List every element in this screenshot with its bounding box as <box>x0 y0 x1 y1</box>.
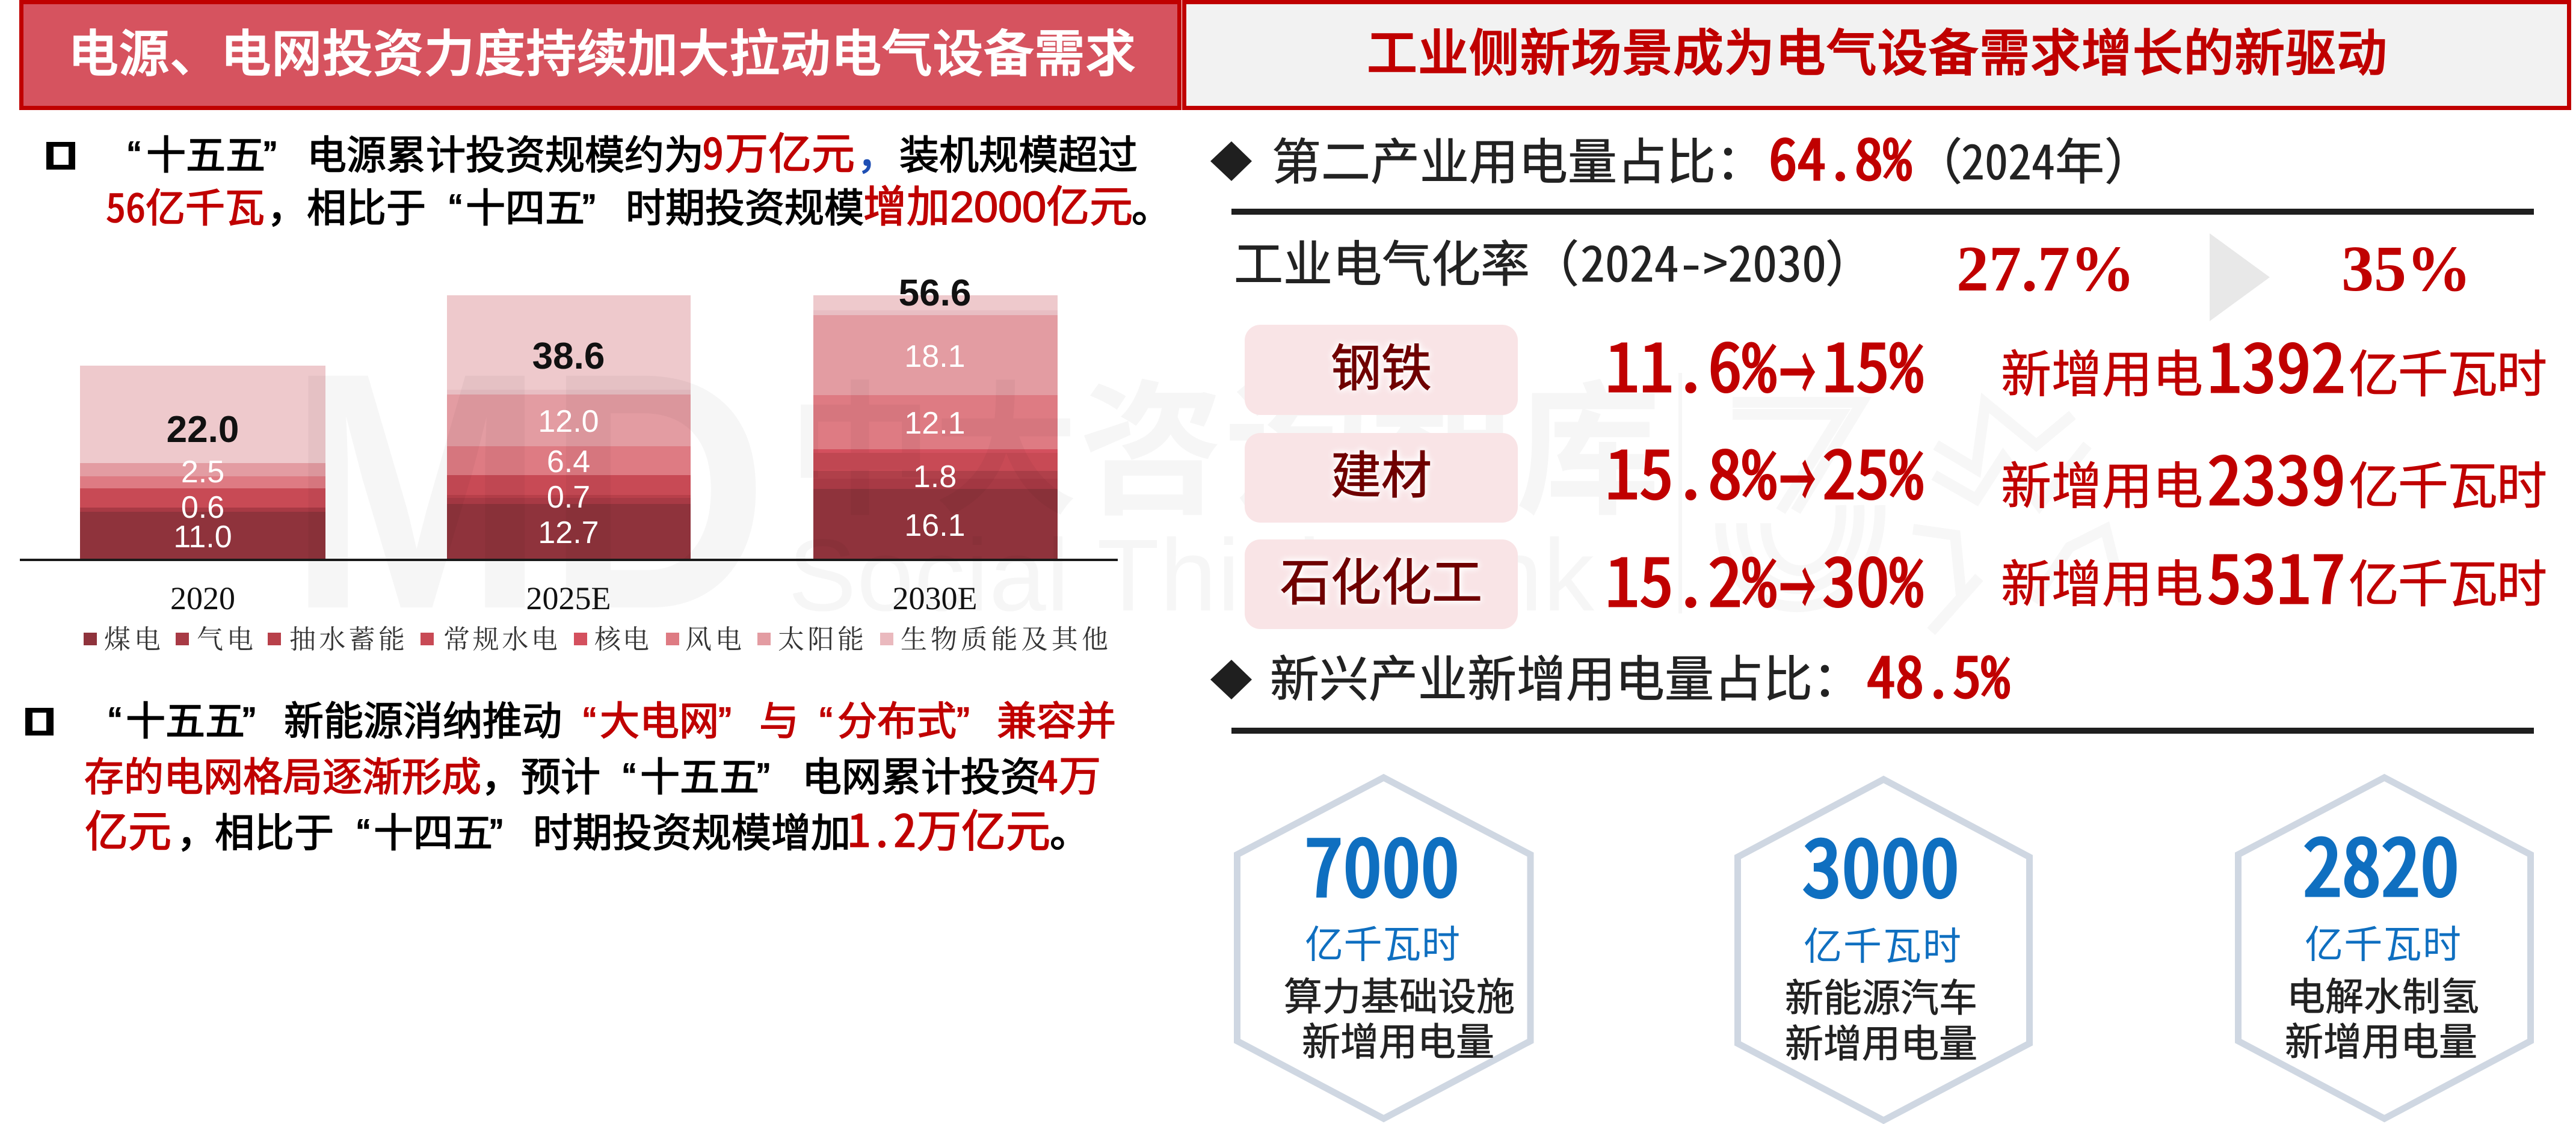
row: industrial electrification rate: 工业电气化率（ <box>1234 238 1579 292</box>
text block: grid investment: 分布式 <box>837 699 957 743</box>
text block: grid investment: 大电网 <box>600 699 719 743</box>
heading: secondary industry share <box>1210 114 2154 197</box>
text block: grid investment: “ <box>583 699 596 743</box>
text block: power investment: 电源累计投资规模约为 <box>307 133 704 177</box>
chart legend: 气电 <box>197 618 253 656</box>
text block: power investment: 万亿元 <box>725 131 855 179</box>
heading: secondary industry share: 2024 <box>1961 124 2055 194</box>
heading: emerging industry share <box>1210 632 2010 714</box>
text block: grid investment: 十四五 <box>374 811 493 855</box>
text block: grid investment: ” <box>957 699 970 743</box>
text block: power investment: “ <box>128 133 141 177</box>
text block: power investment: ” <box>582 186 596 230</box>
row: petrochemicals: 石化化工 <box>1280 554 1482 611</box>
chart data labels: 11.0 <box>173 520 232 554</box>
text block: grid investment: ” <box>242 699 256 743</box>
chart legend: 核电 <box>594 618 649 656</box>
text block: grid investment: 万亿元 <box>917 806 1050 856</box>
icon: hollow square bullet <box>25 708 54 736</box>
chart data labels: 18.1 <box>904 339 966 374</box>
watermark <box>288 302 2124 679</box>
row: petrochemicals: 5317 <box>2207 526 2346 623</box>
hexagon card: electrolytic hydrogen <box>2238 778 2530 1119</box>
row: steel: 钢铁 <box>1331 340 1432 397</box>
text block: power investment: 56 <box>106 176 146 234</box>
chart data labels: 38.6 <box>532 336 605 377</box>
row: building materials: 2339 <box>2207 427 2346 524</box>
text block: power investment: “ <box>449 186 462 230</box>
hexagon card: new energy vehicles: 新增用电量 <box>1785 1022 1977 1066</box>
row: petrochemicals: 新增用电 <box>2001 556 2203 613</box>
row: building materials: 15.8% <box>1605 421 1776 518</box>
arrow: grey triangle <box>2210 233 2270 321</box>
chart: stacked bars of installed capacity <box>80 295 1058 560</box>
heading: secondary industry share: 第二产业用电量占比： <box>1272 135 1765 190</box>
text block: grid investment: 十五五 <box>640 755 759 799</box>
icon: diamond <box>1210 141 1252 181</box>
text block: grid investment: ” <box>718 699 732 743</box>
text block: power investment: 9 <box>702 118 724 182</box>
row: steel: 11.6% <box>1605 314 1776 411</box>
chart data labels: 12.0 <box>538 404 599 439</box>
chart data labels: 22.0 <box>167 409 239 450</box>
chart data labels: 6.4 <box>547 444 590 479</box>
hexagon card: new energy vehicles: 3000 <box>1802 805 1959 920</box>
text block: power investment: ” <box>263 133 277 177</box>
divider <box>1231 728 2534 734</box>
chart x axis labels: 2030E <box>893 580 977 616</box>
text block: grid investment: 时期投资规模增加 <box>533 811 851 855</box>
chart data labels: 1.8 <box>913 459 957 494</box>
text block: grid investment: ” <box>490 811 503 855</box>
heading: emerging industry share: 48.5% <box>1867 632 2010 714</box>
row: building materials: 建材 <box>1331 447 1432 504</box>
chart legend: 太阳能 <box>778 618 864 656</box>
row: building materials: 亿千瓦时 <box>2349 458 2547 515</box>
text block: grid investment: ， <box>177 811 217 855</box>
hexagon card: computing infrastructure <box>1237 778 1530 1119</box>
text block: grid investment: 1.2 <box>848 794 916 860</box>
chart data labels: 0.7 <box>547 480 590 515</box>
chart data labels: 12.1 <box>904 406 966 441</box>
text block: power investment: ， <box>857 133 897 177</box>
row: industrial electrification rate: 35% <box>2341 233 2471 305</box>
text block: grid investment: 兼容并 <box>997 699 1116 743</box>
chart data labels: 16.1 <box>904 508 966 543</box>
chart legend: 常规水电 <box>443 618 558 656</box>
hexagon card: electrolytic hydrogen: 亿千瓦时 <box>2305 923 2461 966</box>
heading: secondary industry share: 64.8% <box>1769 114 1912 197</box>
text block: grid investment: 相比于 <box>215 811 334 855</box>
hexagon card: computing infrastructure: 算力基础设施 <box>1284 975 1515 1019</box>
text block: power investment <box>46 118 1171 234</box>
hexagon card: computing infrastructure: 亿千瓦时 <box>1305 923 1460 966</box>
text block: power investment: 。 <box>1132 186 1171 230</box>
chart data labels: 12.7 <box>538 515 599 550</box>
chart x axis labels: 2025E <box>526 580 611 616</box>
hexagon card: electrolytic hydrogen: 电解水制氢 <box>2287 975 2479 1019</box>
text block: grid investment: 预计 <box>521 755 600 799</box>
text block: grid investment: 十五五 <box>126 699 245 743</box>
text block: power investment: ， <box>267 186 307 230</box>
row: steel: 亿千瓦时 <box>2349 346 2547 403</box>
watermark: 中大咨询智库 <box>788 372 1660 533</box>
row: industrial electrification rate <box>1234 224 2471 321</box>
bar: 2020 <box>80 366 325 560</box>
row: building materials: 25% <box>1822 421 1923 518</box>
text block: grid investment: “ <box>819 699 833 743</box>
hexagon card: computing infrastructure: 7000 <box>1304 805 1459 920</box>
chart axis <box>20 559 1118 561</box>
chart legend: 风电 <box>685 618 742 656</box>
panel: right header <box>1184 2 2569 108</box>
row: petrochemicals: 15.2% <box>1605 529 1776 626</box>
heading: secondary industry share: 年） <box>2055 135 2154 190</box>
text block: power investment: 十四五 <box>466 186 585 230</box>
panel: right header: 工业侧新场景成为电气设备需求增长的新驱动 <box>1367 25 2387 82</box>
hexagon card: electrolytic hydrogen: 新增用电量 <box>2285 1021 2477 1064</box>
chart data labels: 2.5 <box>181 455 224 490</box>
text block: grid investment: “ <box>108 699 122 743</box>
chart data labels <box>167 272 971 554</box>
text block: power investment: 时期投资规模 <box>626 186 864 230</box>
text block: grid investment: ” <box>757 755 770 799</box>
text block: power investment: 十五五 <box>146 133 265 177</box>
text block: grid investment: 存的电网格局逐渐形成 <box>84 755 481 799</box>
icon: hollow square bullet <box>46 142 75 170</box>
panel: left header: 电源、电网投资力度持续加大拉动电气设备需求 <box>68 26 1136 82</box>
hexagon card: new energy vehicles: 亿千瓦时 <box>1804 925 1961 968</box>
chart legend: 生物质能及其他 <box>901 618 1108 656</box>
heading: secondary industry share: （ <box>1913 135 1962 190</box>
text block: power investment: 相比于 <box>307 186 426 230</box>
text block: grid investment: ， <box>481 755 521 799</box>
chart data labels: 56.6 <box>899 272 971 314</box>
chart data labels: 0.6 <box>181 490 224 525</box>
text block: grid investment: “ <box>623 755 636 799</box>
row: steel <box>1245 312 2547 425</box>
row: petrochemicals: 亿千瓦时 <box>2349 556 2547 613</box>
text block: grid investment: 新能源消纳推动 <box>284 699 562 743</box>
chart legend: 抽水蓄能 <box>289 618 405 656</box>
row: petrochemicals <box>1245 526 2547 639</box>
bar: 2030E <box>813 295 1058 560</box>
text block: grid investment <box>25 699 1116 860</box>
hexagon card: new energy vehicles <box>1737 779 2030 1120</box>
text block: power investment: 亿千瓦 <box>146 186 265 230</box>
text block: grid investment: 亿元 <box>85 808 171 856</box>
chart x axis labels: 2020 <box>170 580 235 616</box>
hexagon card: computing infrastructure: 新增用电量 <box>1302 1021 1494 1064</box>
hexagon card: electrolytic hydrogen: 2820 <box>2303 804 2459 919</box>
row: industrial electrification rate: 27.7% <box>1956 233 2135 305</box>
chart x axis labels <box>170 580 977 616</box>
chart legend <box>84 618 1108 656</box>
text block: grid investment: 万 <box>1059 753 1101 800</box>
hexagon card: new energy vehicles: 新能源汽车 <box>1785 977 1977 1020</box>
text block: grid investment: 4 <box>1037 743 1058 803</box>
bar: 2025E <box>447 295 691 560</box>
watermark: Social Think Tank <box>788 518 1595 633</box>
row: petrochemicals: 30% <box>1822 529 1923 626</box>
row: steel: 1392 <box>2207 315 2346 412</box>
panel: left header <box>22 2 1179 108</box>
row: petrochemicals: → <box>1779 526 1816 639</box>
row: building materials <box>1245 419 2547 532</box>
text block: grid investment: 。 <box>1050 811 1089 855</box>
row: steel: → <box>1779 312 1816 425</box>
text block: power investment: 装机规模超过 <box>899 133 1138 177</box>
text block: power investment: 增加2000亿元 <box>863 183 1133 232</box>
text block: grid investment: 电网累计投资 <box>802 755 1040 799</box>
text block: grid investment: “ <box>357 811 370 855</box>
text block: grid investment: 与 <box>759 699 799 743</box>
chart legend: 煤电 <box>104 618 161 656</box>
row: steel: 15% <box>1822 314 1923 411</box>
heading: emerging industry share: 新兴产业新增用电量占比： <box>1270 653 1862 707</box>
row: building materials: → <box>1779 419 1816 532</box>
watermark: MD <box>288 302 769 679</box>
icon: diamond <box>1210 660 1252 699</box>
row: building materials: 新增用电 <box>2001 458 2203 515</box>
row: industrial electrification rate: ） <box>1825 238 1875 292</box>
row: industrial electrification rate: 2024->2030 <box>1580 224 1826 296</box>
row: steel: 新增用电 <box>2001 346 2203 403</box>
divider <box>1231 209 2534 215</box>
